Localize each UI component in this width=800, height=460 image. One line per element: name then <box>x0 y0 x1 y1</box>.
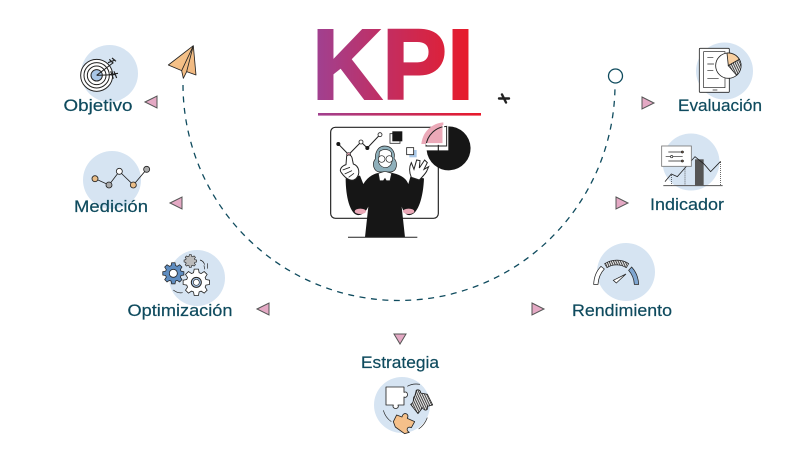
icon background <box>662 134 720 190</box>
label: Estrategia <box>361 353 440 372</box>
label: Optimización <box>128 301 232 320</box>
icon: gauge <box>594 260 639 284</box>
squares <box>390 131 417 157</box>
icon: tablet with pie <box>699 48 741 92</box>
item: Evaluación <box>642 42 762 115</box>
icon: paper plane <box>168 46 196 78</box>
pie chart <box>421 122 471 170</box>
icon: chart with filter panel <box>662 146 723 186</box>
dashed arc connector <box>183 84 615 301</box>
illustration: presenter with charts <box>331 122 471 237</box>
label: Objetivo <box>64 96 132 115</box>
item: Estrategia <box>361 334 440 434</box>
item: Objetivo <box>64 45 157 115</box>
icon background <box>597 243 655 301</box>
title: KPI: KPI <box>312 9 474 121</box>
floor line <box>348 236 417 239</box>
icon: target <box>81 58 118 91</box>
icon background <box>83 151 141 209</box>
label: Evaluación <box>678 96 762 115</box>
label: Indicador <box>650 195 724 214</box>
presentation board <box>331 127 438 218</box>
arrow <box>170 197 182 209</box>
icon background <box>81 45 138 102</box>
arc end circle <box>608 69 622 83</box>
arrow <box>394 334 406 344</box>
arrow <box>145 96 157 108</box>
arrow <box>616 197 628 209</box>
label: Medición <box>74 197 148 216</box>
icon background <box>696 42 753 100</box>
label: Rendimiento <box>572 301 672 320</box>
item: Optimización <box>128 250 269 320</box>
line chart <box>336 133 382 157</box>
icon background <box>374 377 430 433</box>
icon: connected points line <box>92 166 150 188</box>
arrow <box>257 303 269 315</box>
item: Medición <box>74 151 182 216</box>
icon: plus mark <box>499 94 509 102</box>
person <box>340 146 429 237</box>
arrow <box>642 97 654 109</box>
item: Rendimiento <box>532 243 672 320</box>
icon background <box>169 250 225 306</box>
icon: gears <box>163 255 210 296</box>
icon: puzzle pieces <box>383 384 433 434</box>
item: Indicador <box>616 134 724 214</box>
arrow <box>532 303 544 315</box>
title underline <box>318 113 481 116</box>
